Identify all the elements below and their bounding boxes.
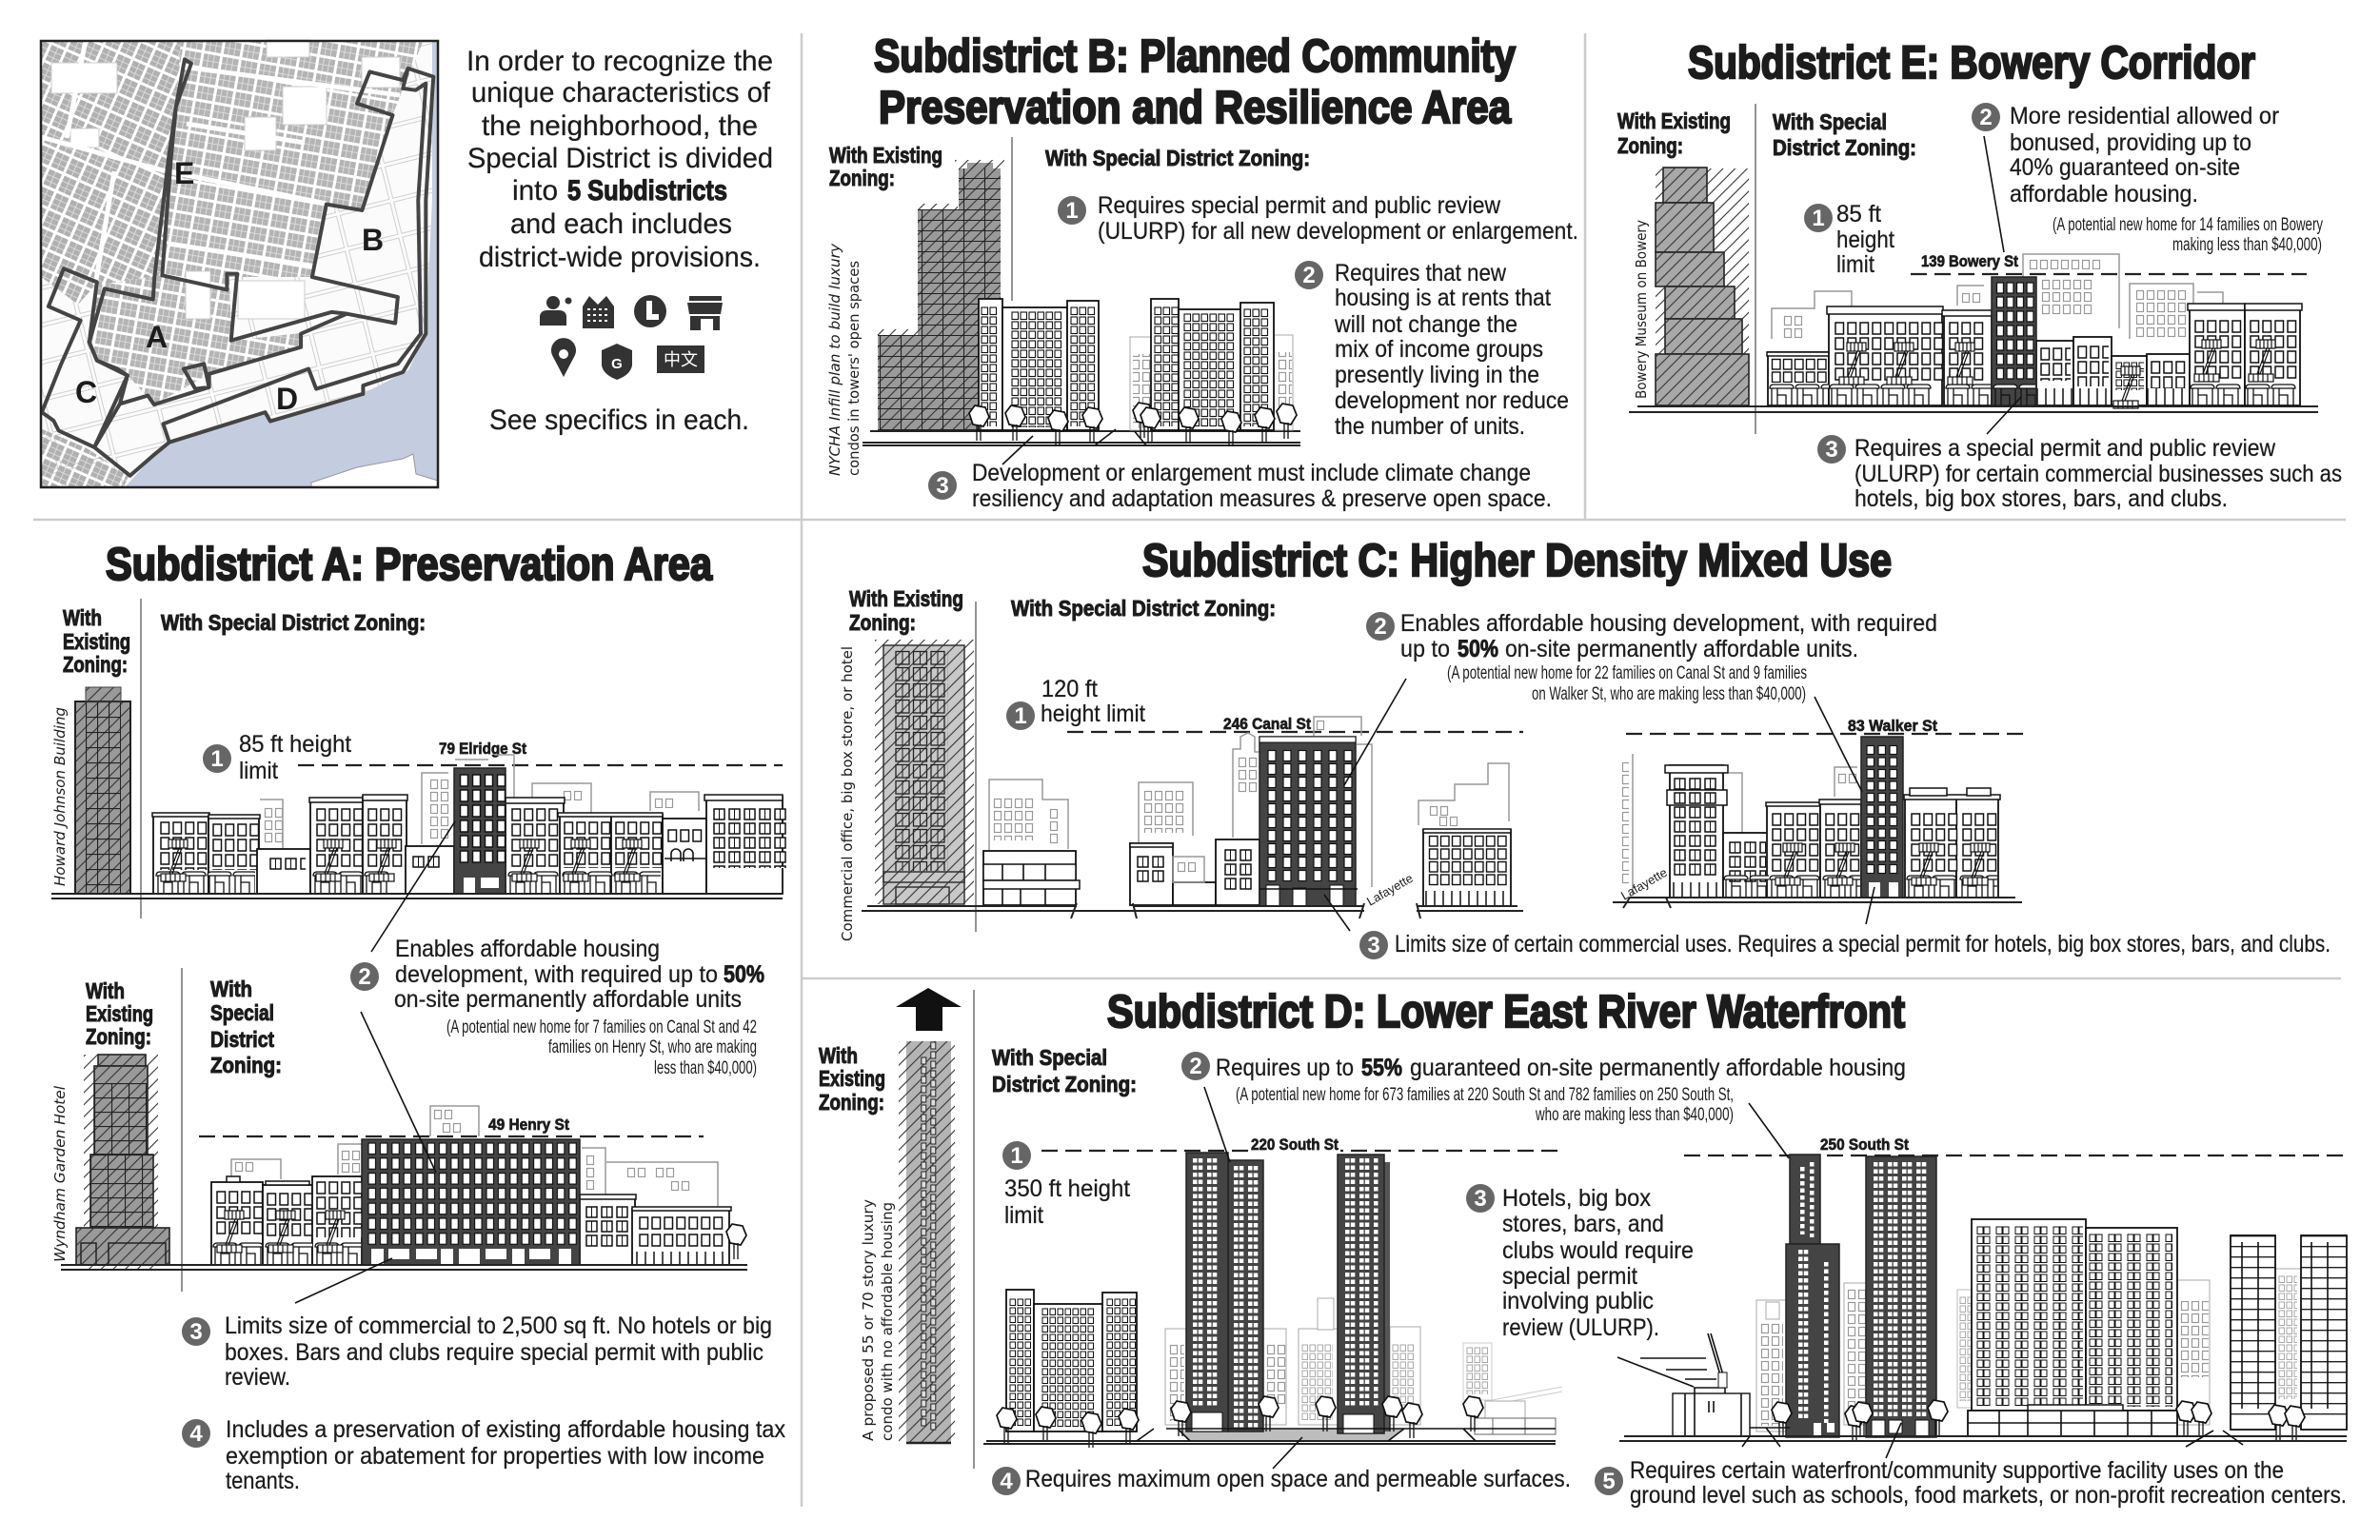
label: existing zoning second <box>86 978 153 1049</box>
ground <box>51 894 783 898</box>
item 2: on-site permanently affordable units <box>394 986 742 1013</box>
label: existing zoning: With Existing <box>849 586 963 611</box>
rotated caption: Howard Johnson Building <box>51 707 69 886</box>
address label: 220 South St <box>1251 1135 1339 1154</box>
item 1: limit <box>1004 1202 1043 1229</box>
intro text: Special District is divided <box>467 143 773 174</box>
height limit line <box>199 1135 704 1137</box>
item 3: Development or enlargement must include climate change <box>972 460 1531 486</box>
icon: pin <box>551 338 576 377</box>
item 1: height <box>1836 227 1894 253</box>
existing zoning tower <box>874 160 1004 430</box>
address label: 246 Canal St <box>1223 715 1311 733</box>
existing zoning tower <box>75 687 130 894</box>
item 2: 50% <box>724 961 764 988</box>
map of subdistricts: A <box>146 320 168 354</box>
item 2: will not change the <box>1334 311 1517 338</box>
item 1: Requires special permit and public review <box>1098 192 1501 219</box>
existing zoning hotel <box>76 1055 169 1269</box>
item 3: special permit <box>1502 1263 1637 1290</box>
item 3: 3 <box>1474 1186 1487 1212</box>
trees 2 <box>1772 1400 2305 1441</box>
label: existing zoning: With <box>819 1043 858 1068</box>
ground <box>61 1265 747 1270</box>
item 3: review (ULURP). <box>1502 1314 1659 1341</box>
label: existing zoning: Zoning: <box>1617 133 1683 158</box>
intro text: 5 Subdistricts <box>567 175 727 207</box>
rotated caption: NYCHA Infill plan to build luxury <box>826 243 843 476</box>
intro text: district-wide provisions. <box>479 242 761 273</box>
item 3: 3 <box>189 1319 203 1345</box>
item 1: 85 ft height <box>239 731 351 758</box>
heading: Subdistrict B: Planned Community <box>874 31 1516 82</box>
label: special district zoning second: District <box>210 1027 274 1052</box>
address label: 139 Bowery St <box>1921 252 2018 270</box>
intro text: into <box>512 175 558 207</box>
item 3: involving public <box>1502 1288 1654 1314</box>
height limit line 1 <box>1067 731 1523 733</box>
background outlines <box>260 755 699 849</box>
heading: Subdistrict D: Lower East River Waterfront <box>1107 987 1905 1037</box>
item 2: on-site permanently affordable units. <box>1505 636 1858 662</box>
item 2: presently living in the <box>1335 362 1539 388</box>
trees <box>969 403 1297 446</box>
item 2: Requires up to <box>1216 1055 1354 1081</box>
item 2: More residential allowed or <box>2010 103 2279 129</box>
item 1: 1 <box>1065 198 1079 224</box>
panel: Subdistrict C <box>839 536 2330 959</box>
item 3: stores, bars, and <box>1502 1211 1664 1237</box>
label: special district zoning <box>1773 109 1916 160</box>
item 2 <box>350 821 764 1078</box>
icon: Chinese language <box>657 346 704 373</box>
label: existing zoning: With Existing <box>1617 109 1731 133</box>
item 3: review. <box>225 1364 290 1391</box>
label: existing zoning: Existing <box>63 629 130 654</box>
rotated caption <box>860 1199 896 1441</box>
icon: shield <box>602 344 632 380</box>
item 2: development, with required up to <box>395 961 718 988</box>
item 2: 2 <box>1979 105 1993 130</box>
item 2: housing is at rents that <box>1335 285 1551 311</box>
existing zoning tower <box>875 640 974 904</box>
item 4 <box>182 1416 785 1494</box>
item 1: 1 <box>1812 206 1825 231</box>
background buildings mid <box>1756 1283 1868 1431</box>
icon: L circle <box>634 295 666 327</box>
label: existing zoning <box>829 143 942 190</box>
background outlines 2 <box>1621 754 1858 895</box>
label: existing zoning: With <box>63 605 102 630</box>
label: existing zoning second: With <box>86 978 125 1003</box>
height limit line <box>298 764 783 766</box>
item 1: limit <box>1836 251 1874 278</box>
item 3 <box>182 1313 772 1391</box>
icon: building <box>583 296 614 328</box>
arrow up <box>896 988 962 1031</box>
waterfront blocks <box>1968 1219 2177 1436</box>
item 1: 1 <box>210 746 224 772</box>
ground <box>863 431 1300 445</box>
heading <box>874 31 1516 133</box>
rotated caption: A proposed 55 or 70 story luxury <box>860 1199 877 1441</box>
label: special district zoning: With Special District Zoning: <box>1011 596 1276 621</box>
item 4: Includes a preservation of existing affordable housing tax <box>226 1416 785 1443</box>
item 2: 2 <box>358 964 371 990</box>
item 2: 2 <box>1374 614 1387 640</box>
trees <box>997 1396 1483 1448</box>
item 4 <box>992 1437 1571 1495</box>
label: special district zoning second: Zoning: <box>210 1053 282 1077</box>
heading: Subdistrict E: Bowery Corridor <box>1688 38 2255 89</box>
existing zoning stacked tower <box>1656 168 1749 405</box>
panel: overview map and intro <box>40 40 773 487</box>
heading: Preservation and Resilience Area <box>879 83 1511 133</box>
community facility at left <box>1617 1333 1750 1436</box>
item 2 <box>1181 1052 1906 1162</box>
intro text: and each includes <box>510 208 732 240</box>
item 1: 350 ft height <box>1004 1175 1130 1202</box>
existing zoning luxury tower <box>899 1041 955 1443</box>
label: special district zoning: District Zoning: <box>992 1072 1137 1096</box>
item 2: development nor reduce <box>1335 387 1569 414</box>
address label 2: 250 South St <box>1820 1135 1909 1154</box>
item 4: 4 <box>1000 1469 1013 1494</box>
label: existing zoning <box>63 605 130 677</box>
street wall <box>1767 277 2302 408</box>
rotated caption: condos in towers' open spaces <box>845 261 863 476</box>
heading: Subdistrict C: Higher Density Mixed Use <box>1142 536 1892 586</box>
background outlines <box>1772 254 2223 340</box>
item 3: resiliency and adaptation measures & preserve open space. <box>972 485 1552 512</box>
item 2: mix of income groups <box>1335 336 1543 363</box>
item 3: 3 <box>1367 933 1380 958</box>
height limit line 1 <box>1041 1150 1562 1152</box>
label: special district zoning second: With <box>210 977 252 1001</box>
item 4: 4 <box>189 1421 203 1447</box>
label: special district zoning second <box>210 977 282 1077</box>
icon: shield: G <box>611 356 623 372</box>
intro text: In order to recognize the <box>466 46 773 77</box>
item 1: (ULURP) for all new development or enlargement. <box>1098 218 1578 245</box>
item 3: Hotels, big box <box>1502 1185 1651 1212</box>
background outlines <box>989 717 1509 887</box>
item 1 <box>1002 1141 1130 1229</box>
label: special district zoning <box>992 1045 1137 1096</box>
label: existing zoning: With Existing <box>829 143 942 168</box>
item 3: boxes. Bars and clubs require special permit with public <box>225 1339 764 1366</box>
item 5: 5 <box>1602 1469 1616 1494</box>
item 3: hotels, big box stores, bars, and clubs. <box>1854 485 2228 512</box>
street 2 buildings <box>1665 737 2000 898</box>
icon: person <box>540 296 571 326</box>
item 3: Limits size of commercial to 2,500 sq ft. No hotels or big <box>225 1313 772 1339</box>
item 3: 3 <box>936 473 949 499</box>
250 South St towers <box>1786 1155 1936 1437</box>
background gray buildings <box>1130 335 1293 430</box>
map of subdistricts: D <box>276 382 298 416</box>
height limit line 2 <box>1684 1155 2346 1156</box>
label: existing zoning: Zoning: <box>819 1090 884 1115</box>
intro text: unique characteristics of <box>471 77 771 109</box>
rotated caption <box>826 243 863 476</box>
panel: Subdistrict B <box>826 31 1578 512</box>
item 1: limit <box>239 758 278 784</box>
label: special district zoning second: Special <box>210 1000 274 1025</box>
item 2: the number of units. <box>1335 413 1525 440</box>
intro text <box>466 46 773 273</box>
label: existing zoning <box>819 1043 885 1115</box>
item 2: Enables affordable housing development, with required <box>1400 610 1937 637</box>
item 2: 55% <box>1361 1055 1402 1081</box>
item 2: guaranteed on-site permanently affordable housing <box>1410 1055 1906 1081</box>
panel: Subdistrict A <box>51 540 786 1494</box>
item 4: Requires maximum open space and permeable surfaces. <box>1025 1466 1571 1492</box>
item 3 <box>928 436 1552 512</box>
item 3 <box>1817 397 2342 512</box>
rotated caption: Bowery Museum on Bowery <box>1633 220 1650 399</box>
item 2: bonused, providing up to <box>2010 129 2251 156</box>
label: special district zoning: With Special District Zoning: <box>161 610 426 635</box>
street wall <box>211 1139 746 1265</box>
icon: Chinese language: 中文 <box>664 350 698 369</box>
highlighted building <box>1259 737 1356 906</box>
existing-scale cluster left <box>1006 1290 1137 1431</box>
street labels Lafayette: Lafayette <box>1364 871 1416 909</box>
far right towers <box>2231 1235 2347 1430</box>
item 2: 40% guaranteed on-site <box>2010 154 2240 181</box>
rotated caption: condo with no affordable housing <box>879 1202 896 1441</box>
water <box>125 40 438 487</box>
background outlines <box>231 1106 718 1206</box>
item 2: making less than $40,000) <box>2172 235 2322 255</box>
ground <box>1629 406 2318 412</box>
item 2: 50% <box>1458 636 1498 662</box>
heading: Subdistrict A: Preservation Area <box>106 540 712 590</box>
item 2: (A potential new home for 7 families on Canal St and 42 <box>446 1017 757 1037</box>
label: existing zoning <box>1617 109 1731 158</box>
NYCHA cluster 1 <box>979 299 1099 430</box>
street 1 buildings <box>983 737 1511 906</box>
item 2: affordable housing. <box>2010 181 2198 207</box>
see specifics note: See specifics in each. <box>489 405 749 436</box>
NYCHA cluster 2 <box>1151 299 1274 430</box>
item 2: 2 <box>1302 263 1316 288</box>
item 4: exemption or abatement for properties with low income <box>226 1443 764 1470</box>
label: existing zoning: Existing <box>819 1066 885 1091</box>
icon: store <box>687 296 723 330</box>
height limit line 2 <box>1626 733 2023 735</box>
panel: Subdistrict E <box>1617 38 2342 512</box>
label: special district zoning: With Special District Zoning: <box>1045 146 1310 170</box>
label: existing zoning second: Existing <box>86 1001 153 1026</box>
address label: 49 Henry St <box>488 1116 569 1134</box>
street wall <box>152 768 786 894</box>
item 3 <box>1466 1184 1694 1341</box>
label: existing zoning: Zoning: <box>829 166 895 190</box>
item 2: (A potential new home for 673 families at 220 South St and 782 families on 250 South St, <box>1236 1085 1734 1105</box>
item 1: 1 <box>1014 703 1027 729</box>
street label Lafayette 2: Lafayette <box>1618 865 1670 903</box>
panel: Subdistrict D <box>819 987 2347 1509</box>
item 2: 2 <box>1189 1054 1202 1079</box>
label: special district zoning: With Special <box>992 1045 1107 1070</box>
item 2: (A potential new home for 22 families on Canal St and 9 families <box>1447 663 1807 683</box>
height limit line <box>1911 273 2307 275</box>
item 3 <box>1324 887 2330 959</box>
item 1 <box>1006 676 1145 730</box>
item 1 <box>1058 192 1578 245</box>
item 2: families on Henry St, who are making <box>548 1037 757 1057</box>
address label 2: 83 Walker St <box>1848 717 1937 735</box>
item 2 leader lines <box>295 1012 436 1303</box>
highlighted building <box>454 768 506 894</box>
item 2 <box>1344 610 1937 792</box>
item 5 <box>1595 1423 2347 1509</box>
item 3: Requires a special permit and public review <box>1854 435 2276 462</box>
highlighted building <box>1861 737 1903 898</box>
label: existing zoning: Zoning: <box>849 610 916 635</box>
label: existing zoning second: Zoning: <box>86 1024 151 1049</box>
ground 2 <box>1619 1436 2347 1441</box>
item 5: Requires certain waterfront/community supportive facility uses on the <box>1630 1457 2284 1484</box>
label: existing zoning <box>849 586 963 635</box>
item 3: 3 <box>1825 437 1838 463</box>
220 South St towers <box>1186 1153 1390 1433</box>
item 1 <box>203 731 351 784</box>
rotated caption: Commercial office, big box store, or hotel <box>839 646 856 941</box>
item 2: Requires that new <box>1335 260 1507 286</box>
item 1: 1 <box>1010 1143 1023 1169</box>
item 1: 120 ft <box>1041 676 1098 702</box>
item 2 <box>1972 103 2323 255</box>
intro text: the neighborhood, the <box>482 110 758 142</box>
item 2: up to <box>1400 636 1450 662</box>
background buildings left <box>1165 1298 1562 1434</box>
map of subdistricts: E <box>174 156 194 190</box>
item 1 <box>1804 201 1894 278</box>
item 2: who are making less than $40,000) <box>1535 1105 1734 1125</box>
item 2: on Walker St, who are making less than $40,000) <box>1532 684 1806 704</box>
item 2 <box>1295 260 1569 440</box>
ground 1 <box>983 1441 1556 1444</box>
item 2: less than $40,000) <box>654 1058 757 1078</box>
ground 1 <box>862 903 1523 918</box>
subdistrict boundaries <box>42 59 433 476</box>
highlighted building <box>362 1139 580 1265</box>
ground 2 <box>1613 898 2022 908</box>
item 4: tenants. <box>226 1468 300 1494</box>
item 2: Enables affordable housing <box>395 936 660 962</box>
address label: 79 Elridge St <box>439 740 526 758</box>
map of subdistricts: C <box>75 375 97 409</box>
rotated caption: Wyndham Garden Hotel <box>51 1085 69 1262</box>
label: existing zoning: Zoning: <box>63 652 128 677</box>
item 1: 85 ft <box>1836 201 1881 227</box>
label: special district zoning: With Special <box>1773 109 1887 134</box>
map of subdistricts: B <box>362 223 384 257</box>
background buildings right <box>1957 1269 2301 1425</box>
highlighted building <box>1992 277 2036 405</box>
item 3: clubs would require <box>1502 1237 1694 1264</box>
park ground <box>1178 1429 1404 1441</box>
map of subdistricts <box>40 40 438 487</box>
label: special district zoning: District Zoning: <box>1773 135 1916 160</box>
item 1: height limit <box>1041 701 1145 727</box>
